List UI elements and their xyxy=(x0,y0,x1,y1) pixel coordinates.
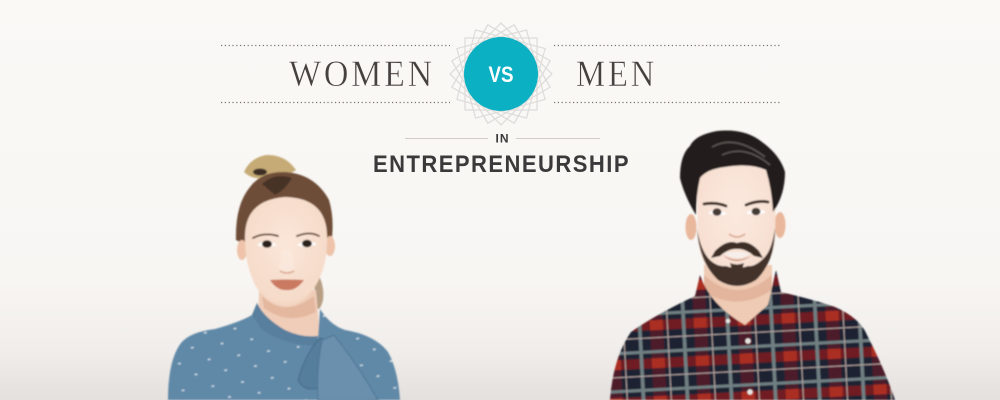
dotted rules xyxy=(221,46,781,102)
man moustache xyxy=(711,242,763,258)
man teeth xyxy=(724,252,751,258)
man button placket xyxy=(726,319,753,395)
woman neck xyxy=(258,290,322,345)
heading: men: MEN xyxy=(576,54,657,95)
badge ring xyxy=(450,23,552,125)
woman face xyxy=(245,197,327,307)
woman hair xyxy=(236,172,333,245)
photo: woman xyxy=(168,155,400,400)
woman eyes xyxy=(257,240,317,248)
man neck xyxy=(704,265,776,336)
man shirt xyxy=(610,270,895,400)
man nose xyxy=(729,234,745,237)
woman neck shadow xyxy=(262,296,316,318)
man chin patch xyxy=(730,263,744,270)
heading: women: WOMEN xyxy=(289,54,435,95)
woman blouse xyxy=(168,303,400,400)
subheading rules xyxy=(405,138,600,140)
woman ponytail strand xyxy=(314,270,323,309)
woman ears xyxy=(237,236,335,260)
woman nose xyxy=(279,250,295,272)
man hair highlight xyxy=(712,142,770,165)
man hair xyxy=(680,130,785,215)
heading: entrepreneurship: ENTREPRENEURSHIP xyxy=(373,151,630,178)
woman lips xyxy=(270,280,304,290)
man eyes xyxy=(708,208,766,216)
woman bow xyxy=(298,335,378,400)
subheading: in: IN xyxy=(496,132,508,146)
man brows xyxy=(704,201,768,206)
man beard xyxy=(697,228,775,286)
man face xyxy=(697,160,776,286)
badge circle xyxy=(464,37,538,111)
woman hair bun xyxy=(244,155,296,178)
photo: man xyxy=(610,130,895,400)
woman hair dark parting xyxy=(262,176,292,195)
man lower lip xyxy=(723,255,752,261)
woman collar xyxy=(252,303,318,346)
badge text: VS xyxy=(488,62,514,87)
bow loop xyxy=(298,338,330,389)
man ears xyxy=(686,212,786,240)
man neck shadow xyxy=(704,275,772,302)
bow tail xyxy=(318,335,378,400)
woman nose shadow xyxy=(280,271,294,273)
woman brows xyxy=(253,234,319,238)
badge: vs xyxy=(450,23,552,125)
